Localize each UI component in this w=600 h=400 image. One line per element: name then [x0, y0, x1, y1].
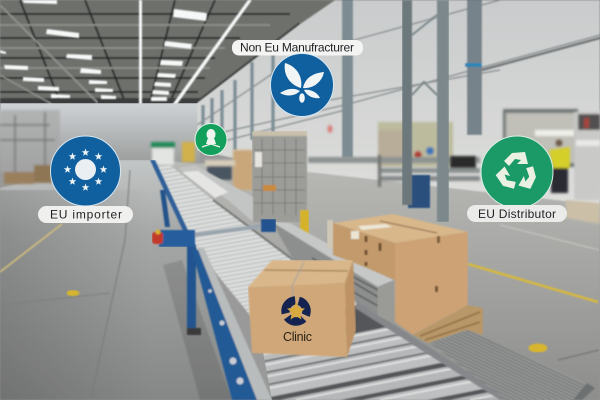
label pill: EU importer: EU importer [50, 208, 122, 222]
background shelving and pallets [0, 110, 253, 190]
right side rack [574, 112, 600, 200]
left floor [0, 160, 265, 400]
label pill: Non Eu Manufracturer: Non Eu Manufracturer [240, 40, 354, 54]
ceiling lights [0, 0, 252, 107]
warehouse window and back doorway [328, 109, 578, 167]
grey parcel locker cabinet [252, 131, 309, 235]
blue sensor arm with red button [152, 219, 276, 247]
floor markings [0, 170, 599, 398]
yellow floor dots [66, 290, 548, 352]
warehouse ceiling [0, 0, 600, 110]
near rollers [263, 306, 505, 400]
icon: blue circle with white leaves [270, 54, 334, 116]
badge: EU distributor [467, 136, 567, 222]
large cardboard box [327, 214, 468, 335]
lower right conveyor [430, 330, 595, 400]
roof beams [0, 5, 98, 135]
right wall [197, 0, 600, 210]
side rail of conveyor [355, 301, 512, 400]
small clinic parcel box [248, 260, 356, 357]
worker in high visibility vest [549, 140, 570, 193]
steel columns and blue bin [402, 0, 449, 222]
label pill: EU Distributor: EU Distributor [478, 207, 556, 221]
badge: non EU manufacturer [232, 40, 363, 116]
badge: EU importer [38, 136, 133, 223]
clinic box label: Clinic [283, 330, 312, 344]
clinic logo [283, 298, 309, 324]
back wall [0, 103, 200, 163]
icon: blue circle with ring of stars [50, 136, 120, 206]
blue conveyor frame [150, 160, 272, 400]
side transfer conveyor [272, 222, 394, 322]
icon: green circle with person [195, 124, 227, 156]
wooden pallet [413, 305, 483, 343]
upper conveyor belt [155, 165, 360, 325]
far right pallet box [566, 200, 600, 224]
right floor [155, 160, 600, 400]
icon: green circle with recycling arrows [481, 136, 553, 208]
guard rail [308, 155, 480, 187]
